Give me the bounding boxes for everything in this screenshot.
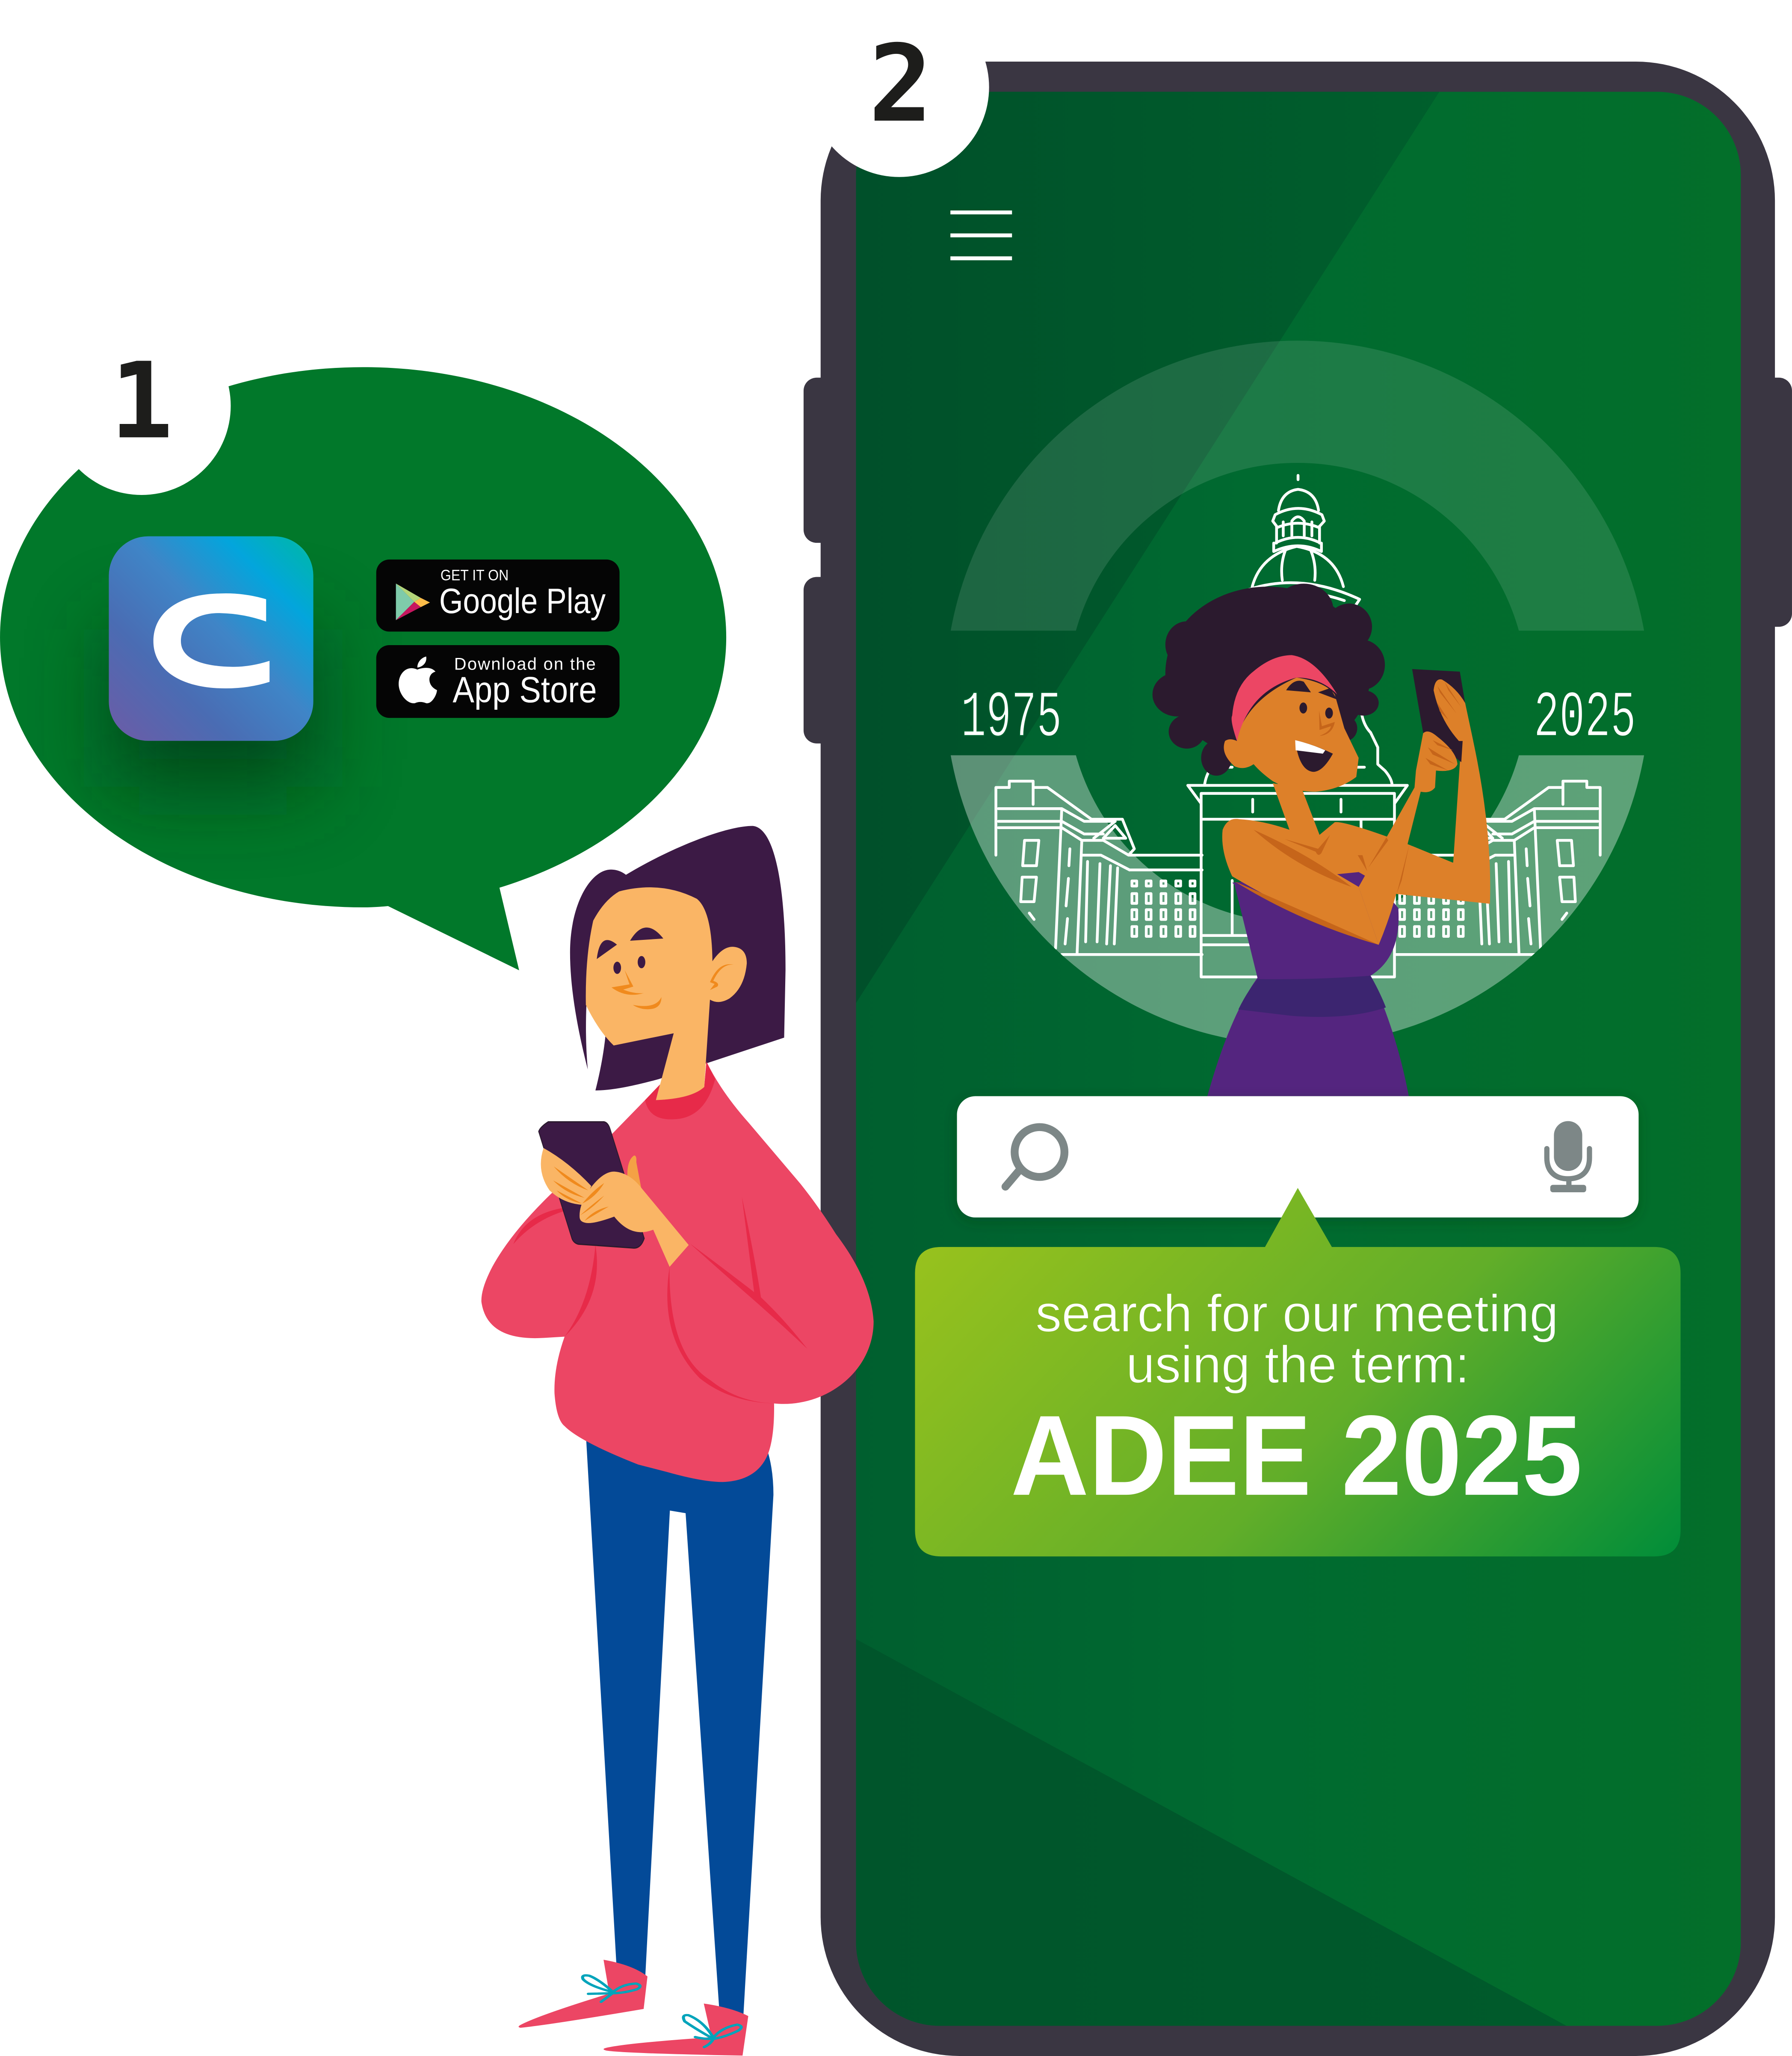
dress waistband <box>1239 976 1386 1017</box>
sweater collar <box>645 1062 715 1120</box>
callout line 2: using the term: <box>1126 1335 1470 1394</box>
woman head <box>1224 678 1359 792</box>
number 1 badge <box>53 317 231 495</box>
girl front hand <box>580 1172 689 1267</box>
icon: apple <box>399 657 437 703</box>
panel: smartphone step 2 <box>804 0 1792 2056</box>
icon: microphone <box>1547 1121 1589 1192</box>
label: download on the: Download on the <box>454 655 596 673</box>
callout shape <box>915 1188 1680 1556</box>
button: App Store <box>376 645 620 718</box>
label: get it on: GET IT ON <box>441 567 509 584</box>
woman forearm and hand <box>1359 732 1458 945</box>
bubble shape <box>0 367 726 970</box>
right shoe <box>603 2003 748 2056</box>
girl jeans <box>586 1436 773 2022</box>
icon: app logo <box>109 536 313 741</box>
number 1 badge: 1 <box>110 340 173 462</box>
girl shoes <box>519 1960 748 2056</box>
woman face features <box>1286 681 1337 772</box>
girl sweater <box>482 1062 874 1482</box>
girl back hand <box>541 1148 591 1205</box>
number 2 badge <box>810 0 989 177</box>
woman hair <box>1153 584 1385 776</box>
woman raised hand <box>1434 679 1473 741</box>
callout: search instruction <box>915 1188 1680 1556</box>
illustration: capitol building <box>996 475 1600 977</box>
year 1975: 1975 <box>961 681 1062 755</box>
illustration: woman taking selfie <box>1153 584 1490 1096</box>
panel: speech bubble step 1 <box>0 317 726 970</box>
girl smartphone <box>539 1122 644 1248</box>
phone screen <box>856 92 1741 2026</box>
shoe laces <box>583 1976 741 2047</box>
phone side buttons <box>804 378 1792 744</box>
ring: lower arc <box>951 755 1644 1038</box>
woman dress <box>1207 871 1409 1096</box>
selfie phone <box>1412 669 1465 762</box>
icon: hamburger menu <box>950 213 1012 258</box>
button: Google Play <box>376 560 620 631</box>
phone body <box>821 62 1775 2056</box>
label: Google Play: Google Play <box>439 581 606 621</box>
girl face and neck <box>586 887 747 1100</box>
number 2 badge: 2 <box>869 22 932 146</box>
illustration: girl using phone <box>482 826 874 2056</box>
label: App Store: App Store <box>452 670 597 711</box>
woman skin creases <box>1235 682 1461 945</box>
icon: play triangle <box>396 584 430 620</box>
woman right arm <box>1335 690 1490 904</box>
icon: magnifier <box>1005 1127 1065 1187</box>
callout line 1: search for our meeting <box>1035 1284 1558 1343</box>
girl hair <box>570 826 786 1090</box>
icon shadow <box>112 629 315 787</box>
girl thumb <box>627 1155 641 1188</box>
year 2025: 2025 <box>1534 681 1636 755</box>
sweater creases <box>513 1197 807 1404</box>
woman headband <box>1232 655 1337 741</box>
girl face features <box>597 927 734 1009</box>
search bar <box>957 1096 1638 1218</box>
left shoe <box>519 1960 648 2028</box>
callout keyword: ADEE 2025 <box>1011 1392 1582 1519</box>
ring: upper arc <box>951 341 1644 631</box>
woman left arm and chest <box>1222 783 1390 945</box>
